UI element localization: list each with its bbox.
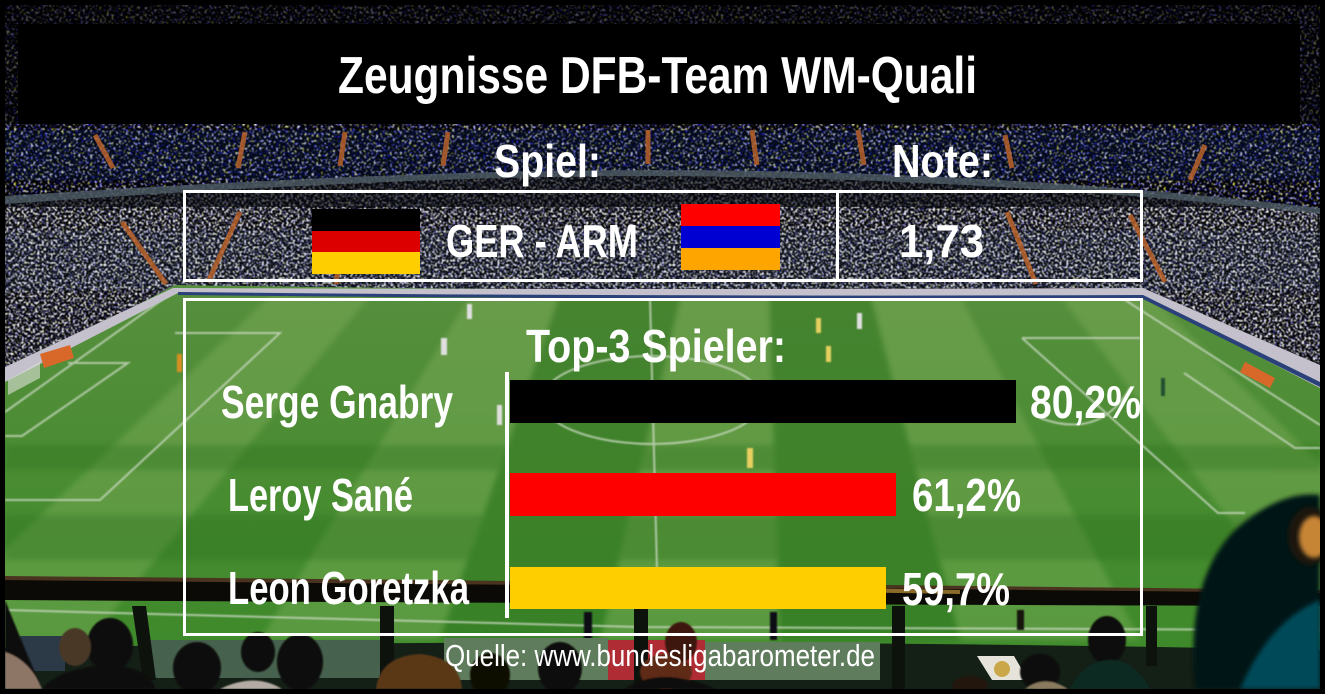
aisles [95, 130, 1205, 284]
crowd stands [5, 5, 1320, 405]
row: Leon Goretzka: 59,7% [902, 563, 1010, 615]
row: Leon Goretzka [228, 562, 1010, 615]
divider [836, 190, 839, 282]
match label: GER - ARM [446, 215, 638, 267]
row: Leroy Sané: Leroy Sané [228, 469, 413, 521]
row: Serge Gnabry: Serge Gnabry [221, 376, 453, 428]
goal left [8, 362, 40, 395]
perimeter boards [5, 288, 1320, 388]
advertising panels [20, 636, 880, 680]
icon: Armenian flag [681, 204, 780, 270]
spectators [5, 600, 1150, 694]
pillars [132, 606, 1157, 689]
pitch lines [5, 292, 1320, 630]
dim top strip [5, 5, 1320, 25]
grade value: 1,73 [899, 215, 984, 267]
heading: Spiel: Spiel: [494, 135, 601, 187]
row: Leroy Sané: 61,2% [912, 469, 1021, 521]
title band [18, 24, 1300, 124]
concourse band [5, 170, 1320, 214]
row: Leroy Sané [228, 469, 1021, 521]
bar chart [221, 372, 1141, 618]
lower tier [5, 172, 1320, 367]
club banner [977, 656, 1028, 680]
players [177, 304, 1165, 640]
axis [505, 372, 509, 618]
source note: Quelle: www.bundesligabarometer.de [445, 638, 875, 673]
heading: Note: Note: [892, 135, 993, 187]
railing [5, 578, 1320, 606]
panel heading: Top-3 Spieler: [526, 320, 786, 372]
blurred cap foreground [1193, 494, 1325, 689]
lower stand [5, 642, 1320, 689]
row: Leon Goretzka: Leon Goretzka [228, 562, 469, 614]
icon: German flag [312, 209, 420, 274]
row: Serge Gnabry: 80,2% [1030, 376, 1141, 428]
title: Zeugnisse DFB-Team WM-Quali [338, 47, 977, 105]
row: Serge Gnabry [221, 376, 1141, 428]
pitch [0, 280, 1325, 650]
panel: top-3 players [184, 300, 1142, 634]
panel: match and grade [184, 190, 1142, 282]
